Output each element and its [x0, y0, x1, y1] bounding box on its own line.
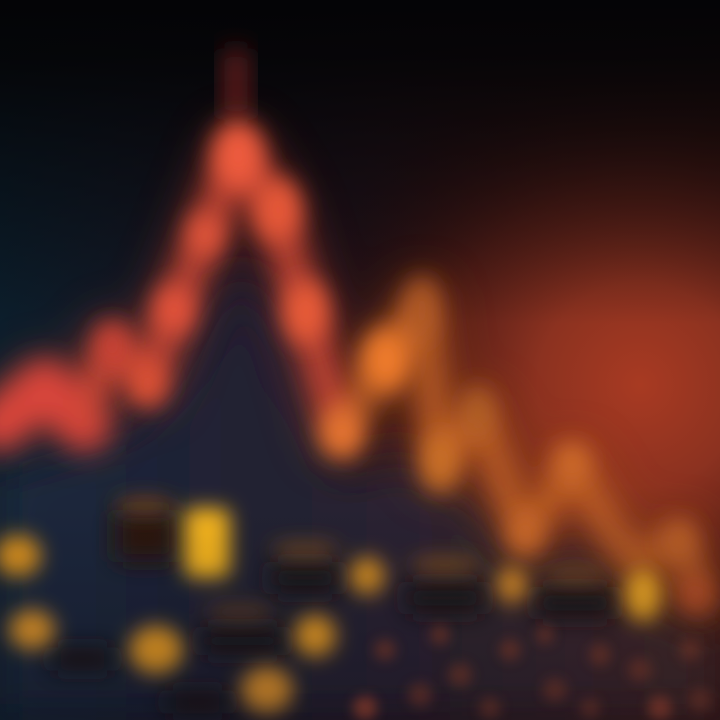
spire at chart peak [224, 48, 248, 120]
bright nodes on the chart line [98, 121, 710, 611]
small window lights, lower right [353, 625, 712, 720]
chart line [0, 150, 700, 600]
soft halo around chart line [0, 150, 700, 600]
dark mountain body under the chart line [0, 270, 720, 720]
amber lights [0, 497, 662, 713]
city rooftops: dark silhouettes [50, 510, 615, 714]
